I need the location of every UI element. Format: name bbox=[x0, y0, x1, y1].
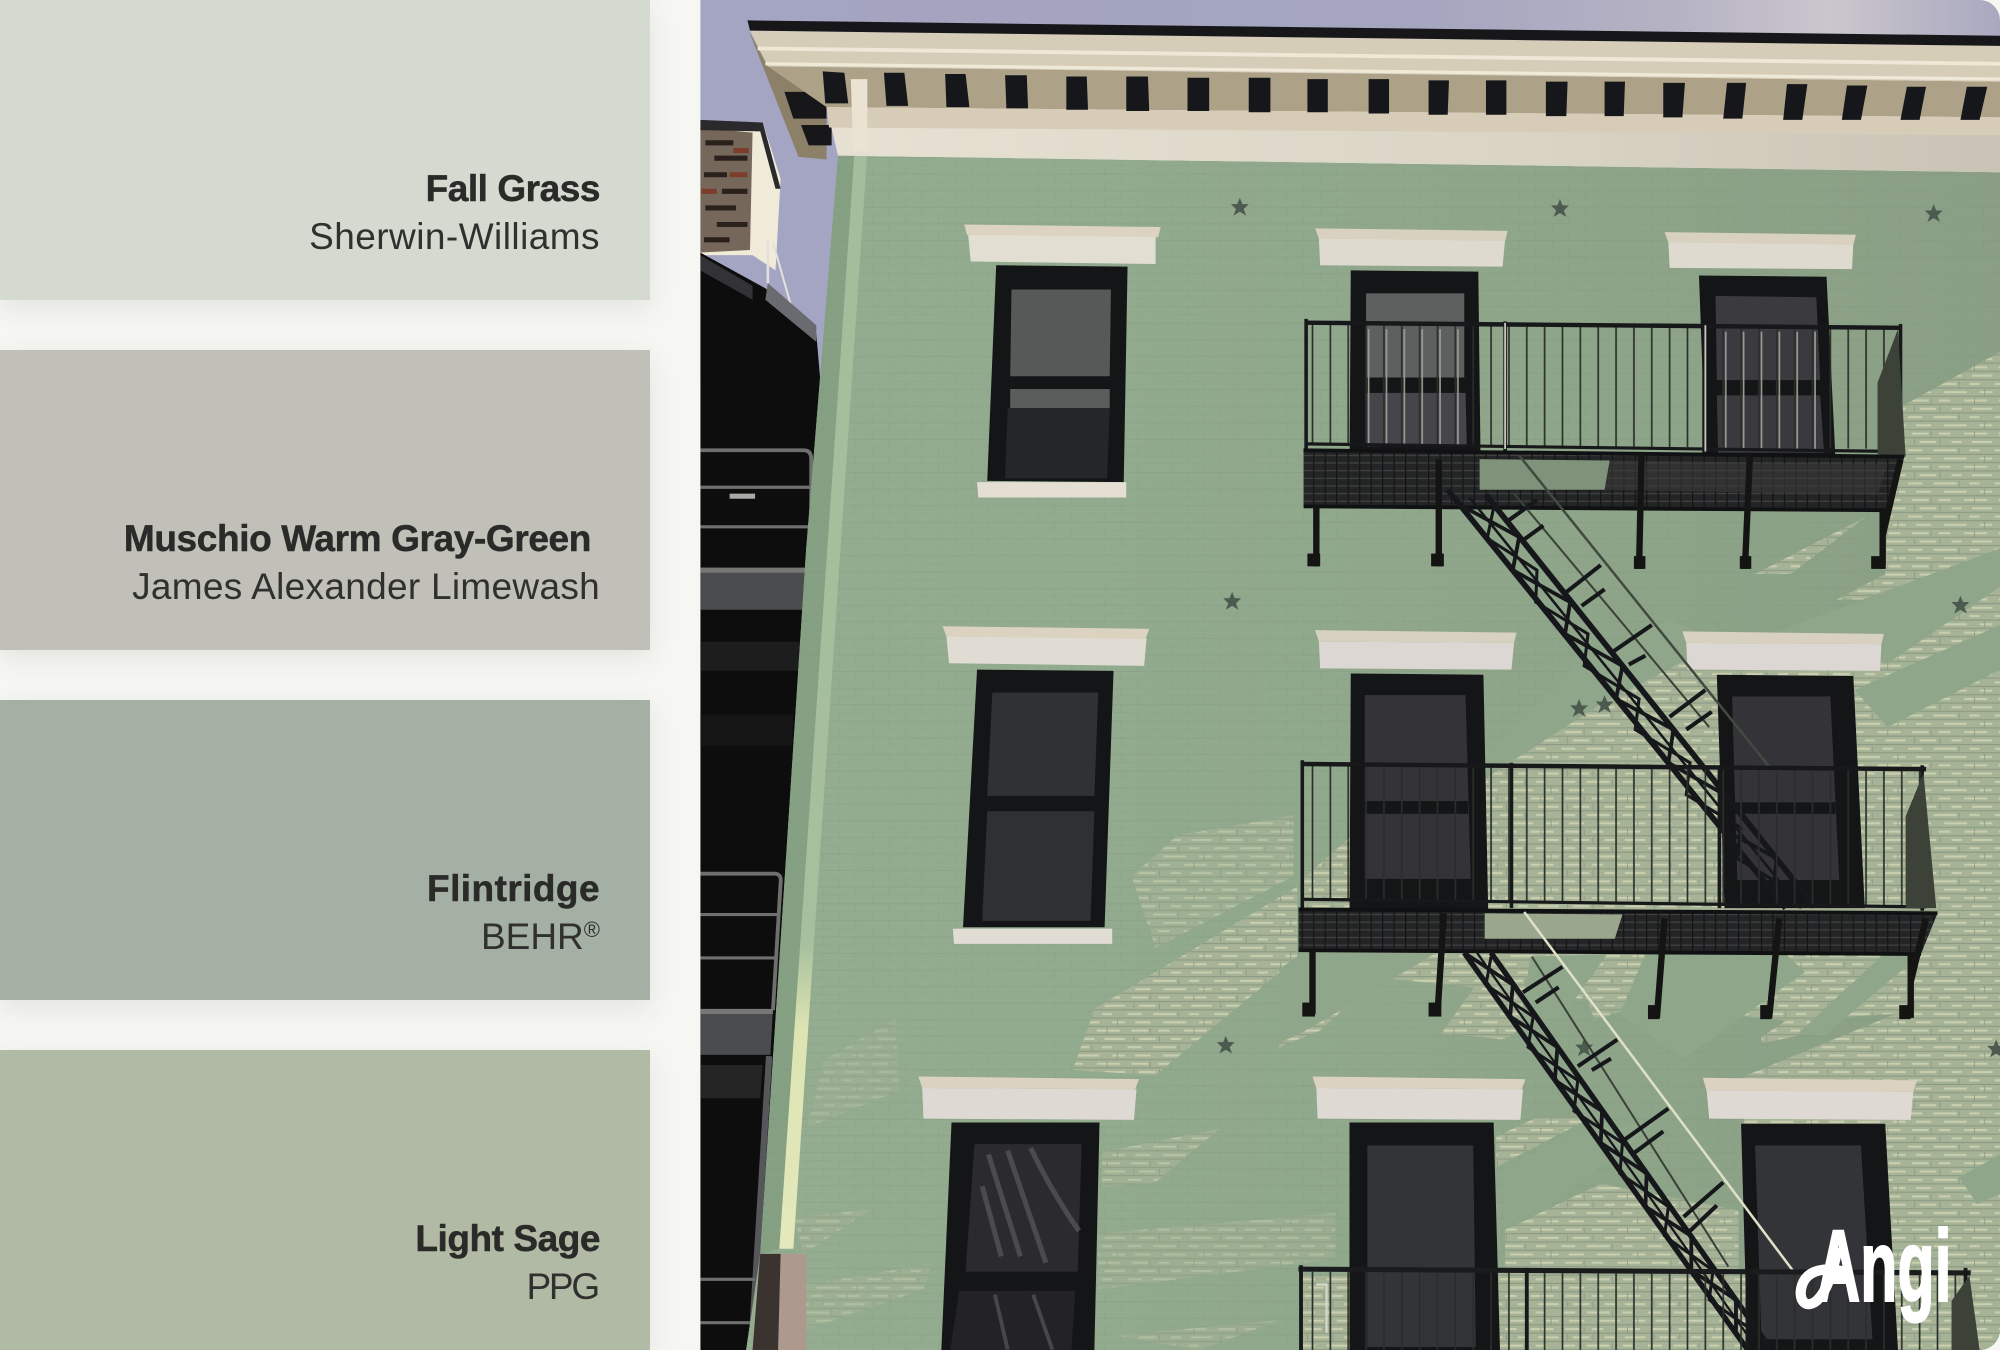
dentils bbox=[823, 71, 1987, 120]
photo: green painted brick building with fire escapes bbox=[700, 0, 2000, 1350]
swatch brand: James Alexander Limewash: James Alexander Limewash bbox=[132, 566, 600, 607]
decorative wall stars bbox=[1217, 198, 2000, 1057]
logo: Angi bbox=[1796, 1226, 1948, 1324]
swatch name: Light Sage: Light Sage bbox=[415, 1218, 600, 1259]
fire escape balcony 3 bbox=[1298, 1265, 1980, 1350]
window 1 bbox=[964, 224, 1161, 497]
window 8 bbox=[1312, 1077, 1526, 1350]
swatch brand: PPG: PPG bbox=[526, 1266, 598, 1307]
swatch brand: Sherwin-Williams: Sherwin-Williams bbox=[309, 216, 600, 257]
fire escape stair 1 bbox=[1448, 455, 1815, 908]
panel: Flintridge swatch bbox=[0, 700, 650, 1000]
panel: Fall Grass swatch bbox=[0, 0, 650, 300]
fire escape balcony 1 bbox=[1304, 319, 1906, 569]
fire escape balcony 2 bbox=[1298, 760, 1938, 1019]
balcony 2 supports bbox=[1312, 913, 1926, 1018]
panel: Muschio Warm Gray-Green swatch bbox=[0, 350, 650, 650]
window 4 bbox=[943, 626, 1149, 944]
base pipe stump bbox=[753, 1254, 806, 1350]
upper railing bbox=[700, 448, 814, 528]
swatch name: Flintridge: Flintridge bbox=[427, 868, 600, 909]
lower railing bbox=[700, 874, 781, 1010]
swatch brand: BEHR: BEHR® bbox=[481, 916, 600, 957]
window row 3 bbox=[918, 1077, 1917, 1350]
window row 2 bbox=[943, 626, 1884, 944]
neighbouring dark building bbox=[700, 120, 823, 1350]
shadow bands over sunlight bbox=[1279, 548, 2000, 1230]
wall strip left of pipe bbox=[760, 156, 855, 1254]
window 9 bbox=[1703, 1078, 1917, 1350]
window 3 bbox=[1664, 232, 1856, 454]
balcony 1 supports bbox=[1316, 453, 1901, 569]
window 6 bbox=[1682, 631, 1884, 908]
roof cornice bbox=[747, 20, 2000, 172]
sunlight patches on bricks bbox=[795, 352, 2000, 1350]
chimney bbox=[700, 120, 793, 314]
swatch name: Muschio Warm Gray-Green: Muschio Warm Gray-Green bbox=[124, 518, 591, 559]
wall bbox=[746, 156, 2000, 1350]
fire escape stair 2 bbox=[1464, 912, 1795, 1349]
panel: Light Sage swatch bbox=[0, 1050, 650, 1350]
window row 1 bbox=[964, 224, 1856, 497]
sky bbox=[700, 0, 2000, 77]
swatch name: Fall Grass: Fall Grass bbox=[426, 168, 600, 209]
window 2 bbox=[1315, 228, 1508, 450]
window 5 bbox=[1315, 630, 1517, 926]
pipe bbox=[779, 79, 867, 1249]
window 7 with reflections bbox=[918, 1077, 1139, 1350]
